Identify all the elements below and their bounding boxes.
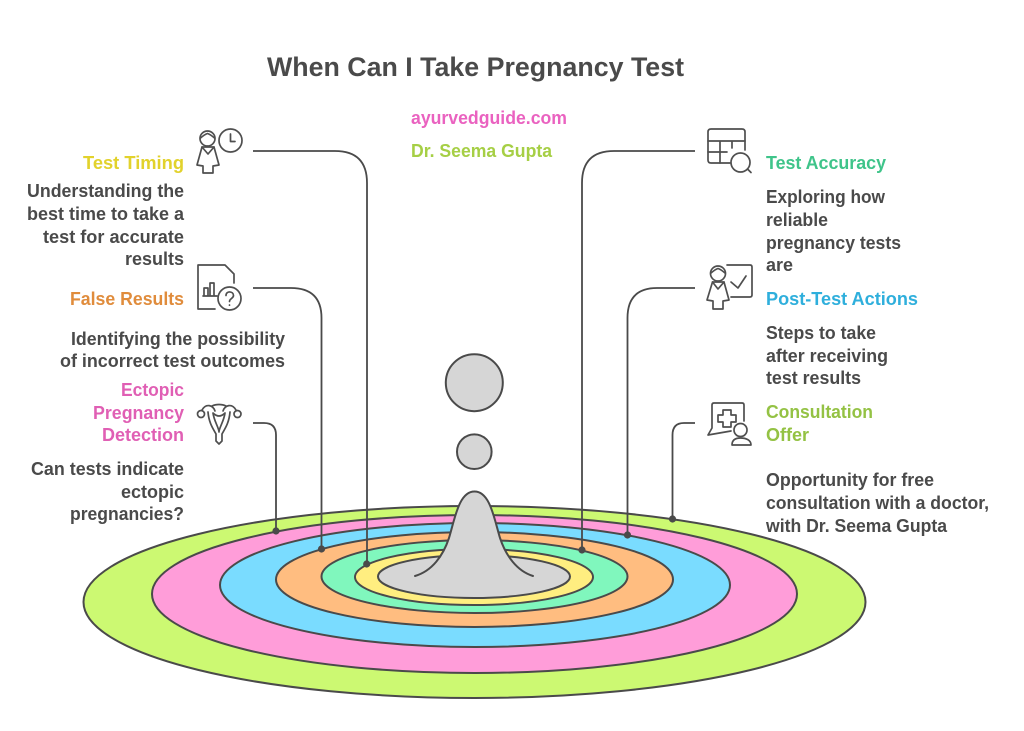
description: test for accurate [43,227,184,247]
item: false results [60,265,285,371]
connector: false results [253,288,325,553]
icon: document with chart and question mark [198,265,241,310]
description: Understanding the [27,181,184,201]
description: Exploring how [766,187,886,207]
description: Identifying the possibility [71,329,285,349]
heading: Detection [102,425,184,445]
concentric ripple rings [84,506,866,698]
item: test timing [27,129,242,269]
item: ectopic pregnancy detection [31,380,241,524]
description [766,187,901,275]
heading: Pregnancy [93,403,184,423]
connector: post-test actions [624,288,695,539]
description: Steps to take [766,323,876,343]
description [31,459,184,524]
small droplet [457,434,492,469]
heading: False Results [70,289,184,309]
icon: person with checklist board [707,265,752,309]
heading [93,380,184,445]
heading: Test Timing [83,153,184,173]
description: after receiving [766,346,888,366]
description: results [125,249,184,269]
icon: table with magnifier [708,129,751,172]
icon: chat bubble with medical cross and person [708,403,751,445]
heading [766,402,873,445]
connector: consultation offer [669,423,695,523]
icon: uterus [198,404,241,444]
description: ectopic [121,482,184,502]
heading: Ectopic [121,380,184,400]
large droplet [446,354,503,411]
description: Can tests indicate [31,459,184,479]
description: with Dr. Seema Gupta [765,516,948,536]
heading: Post-Test Actions [766,289,918,309]
description: test results [766,368,861,388]
item: test accuracy [708,129,901,275]
item: consultation offer [708,402,989,536]
title: When Can I Take Pregnancy Test [267,52,684,82]
heading: Offer [766,425,809,445]
author label: Dr. Seema Gupta [411,141,553,161]
description: are [766,255,793,275]
item: post-test actions [707,265,918,388]
description [27,181,185,269]
description [766,323,888,388]
description: pregnancies? [70,504,184,524]
connector: ectopic pregnancy detection [253,423,280,535]
icon: person with clock [197,129,242,173]
description: Opportunity for free [766,470,934,490]
connector: test timing [253,151,370,568]
connector: test accuracy [578,151,695,554]
description [765,470,989,536]
description: best time to take a [27,204,185,224]
description: pregnancy tests [766,233,901,253]
splash peak outline [415,492,533,576]
description [60,329,285,371]
description: of incorrect test outcomes [60,351,285,371]
heading: Consultation [766,402,873,422]
heading: Test Accuracy [766,153,886,173]
description: reliable [766,210,828,230]
description: consultation with a doctor, [766,493,989,513]
website label: ayurvedguide.com [411,108,567,128]
splash peak [415,492,533,580]
